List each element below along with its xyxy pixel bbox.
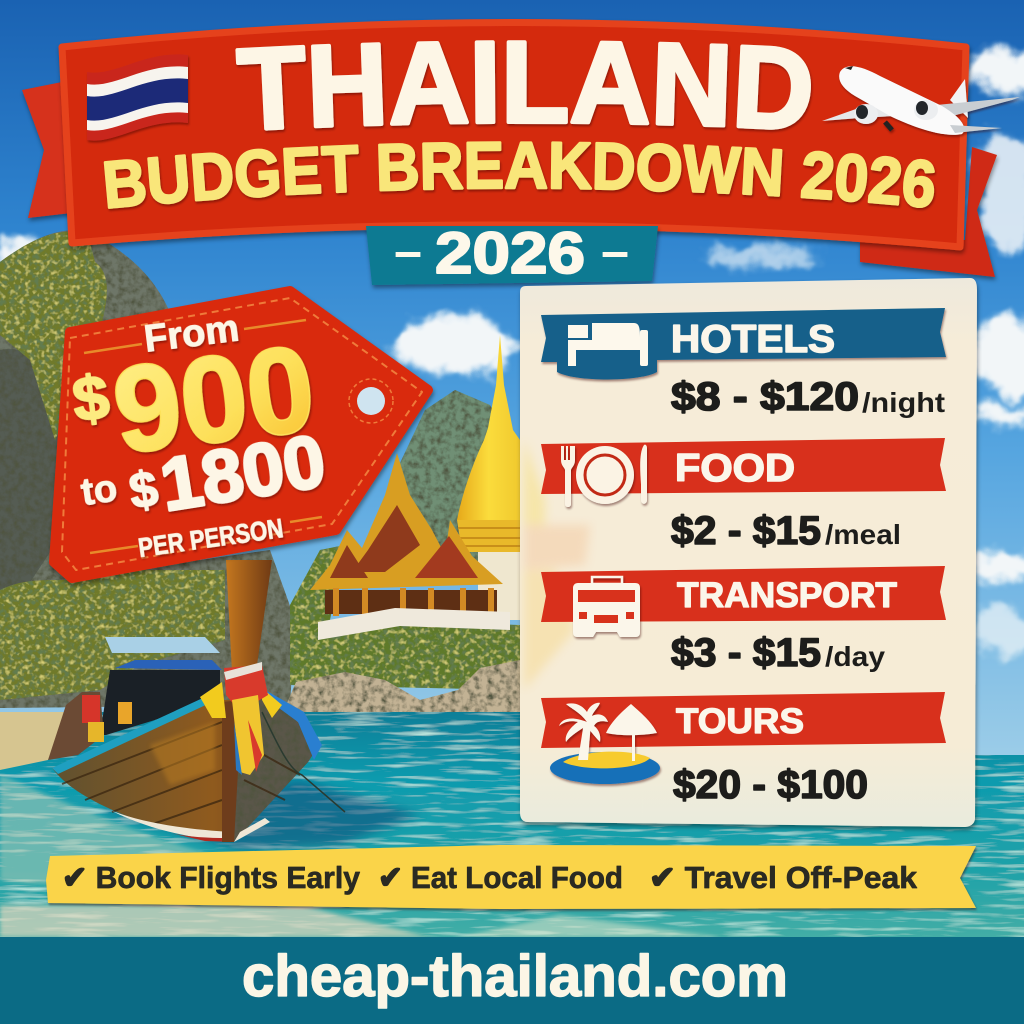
tips ribbon [46,845,976,909]
icon: plate and cutlery [561,445,647,507]
row: hotels: /night [862,387,945,418]
tag text: 900: 900 [106,320,321,479]
boat ribbons [200,662,282,775]
tag text: from: From [142,307,241,361]
year ribbon: – [601,223,629,279]
tip: travel off-peak: ✔ Travel Off-Peak [649,860,918,895]
tag text: 1800: $ [125,460,162,520]
background: sea [0,712,1024,940]
background: boat shadow on water [100,780,420,850]
background: sky [0,0,1024,760]
panel: costs [520,278,977,827]
icon: airplane [822,66,1020,135]
year ribbon: – [394,223,422,279]
subtitle text: BUDGET BREAKDOWN 2026 [104,141,937,212]
row: food: $2 - $15 [671,509,821,553]
row: transport: /day [825,641,885,672]
faded stupa ghost in panel [524,440,590,690]
year ribbon [366,221,658,286]
row: transport: $3 - $15 [671,631,821,675]
row: transport: TRANSPORT [677,576,897,615]
tag hole [349,379,393,423]
icon: island [550,703,660,784]
limestone cliff [0,230,520,708]
tip: eat local food: ✔ Eat Local Food [378,860,623,895]
row: hotels: HOTELS [671,318,835,361]
golden stupa [457,335,524,620]
title banner [22,19,1000,285]
tag text: per person: PER PERSON [136,513,285,563]
tag text: 1800: 1800 [155,419,331,527]
year ribbon: 2026 [435,221,585,286]
row: food: FOOD [675,447,795,490]
tag text: dollar sign: $ [69,363,113,436]
row: tours: $20 - $100 [673,763,868,807]
boat cargo [48,692,104,760]
icon: Thai flag [87,54,188,141]
banner right tail [860,147,997,277]
tag text: to: to [78,467,120,514]
banner body [62,22,966,247]
banner left tail [22,80,80,218]
row: hotels [541,308,946,419]
icon: sofa bed [568,323,648,366]
boat canopy [105,637,220,653]
boat prow post [226,560,272,672]
website url: cheap-thailand.com [242,944,788,1009]
footer bar [0,937,1024,1024]
tip: book flights early: ✔ Book Flights Early [62,860,361,895]
row: tours: TOURS [676,702,804,741]
temple pavilion [310,453,510,640]
title text: THAILAND [235,40,814,134]
boat hull [52,693,320,842]
distant mountain [392,390,525,570]
row: hotels: $8 - $120 [671,375,859,419]
background: clouds [0,48,1024,656]
price tag [54,291,428,578]
row: food: /meal [825,519,901,550]
row: transport [541,566,946,675]
longtail boat [48,560,345,842]
rocks below the temple [285,660,520,712]
row: tours [541,692,946,807]
icon: bus [573,577,640,637]
background: sand shore [0,712,720,937]
row: food [541,438,946,553]
